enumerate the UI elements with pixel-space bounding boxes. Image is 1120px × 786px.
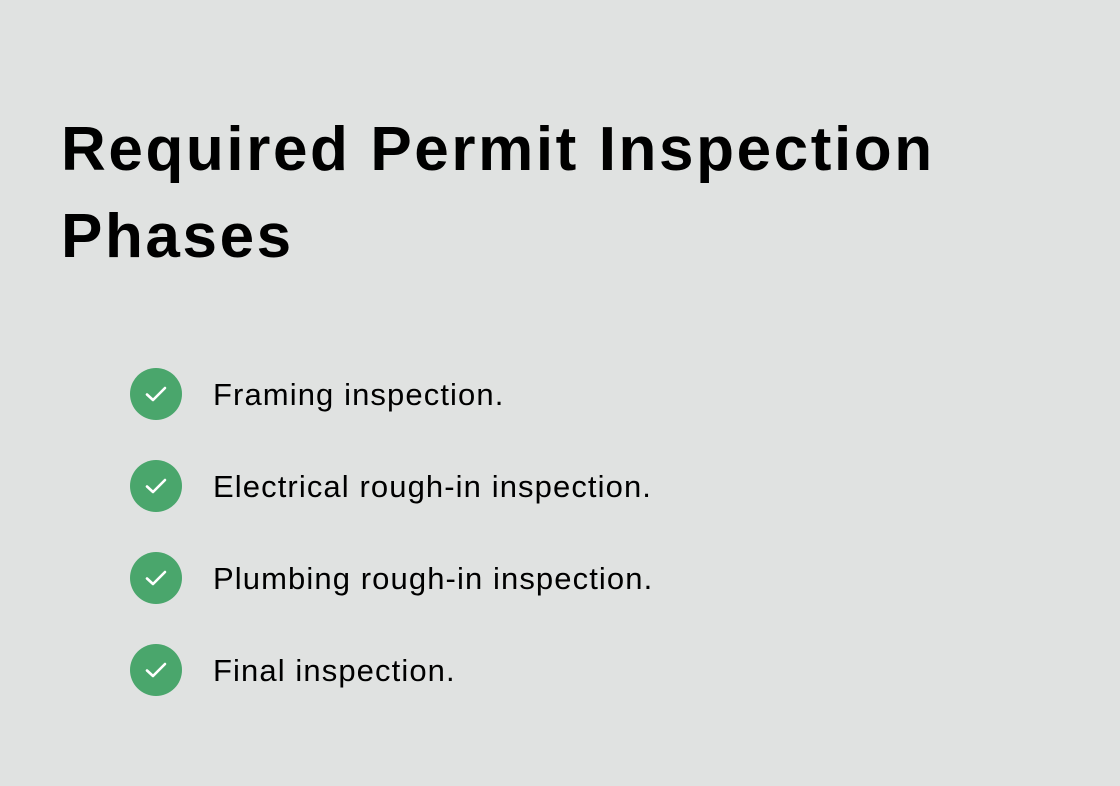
text: Final inspection. <box>213 653 456 688</box>
icon: check circle <box>130 644 182 696</box>
text: Framing inspection. <box>213 377 504 412</box>
icon: check circle <box>130 460 182 512</box>
icon: check circle <box>130 552 182 604</box>
list item: framing <box>130 368 504 420</box>
title <box>61 115 935 271</box>
text: Electrical rough-in inspection. <box>213 469 652 504</box>
text: Plumbing rough-in inspection. <box>213 561 653 596</box>
list item: final <box>130 644 456 696</box>
title: Phases <box>61 202 294 271</box>
list item: plumbing <box>130 552 653 604</box>
list item: electrical <box>130 460 652 512</box>
title: Required Permit Inspection <box>61 115 935 184</box>
icon: check circle <box>130 368 182 420</box>
